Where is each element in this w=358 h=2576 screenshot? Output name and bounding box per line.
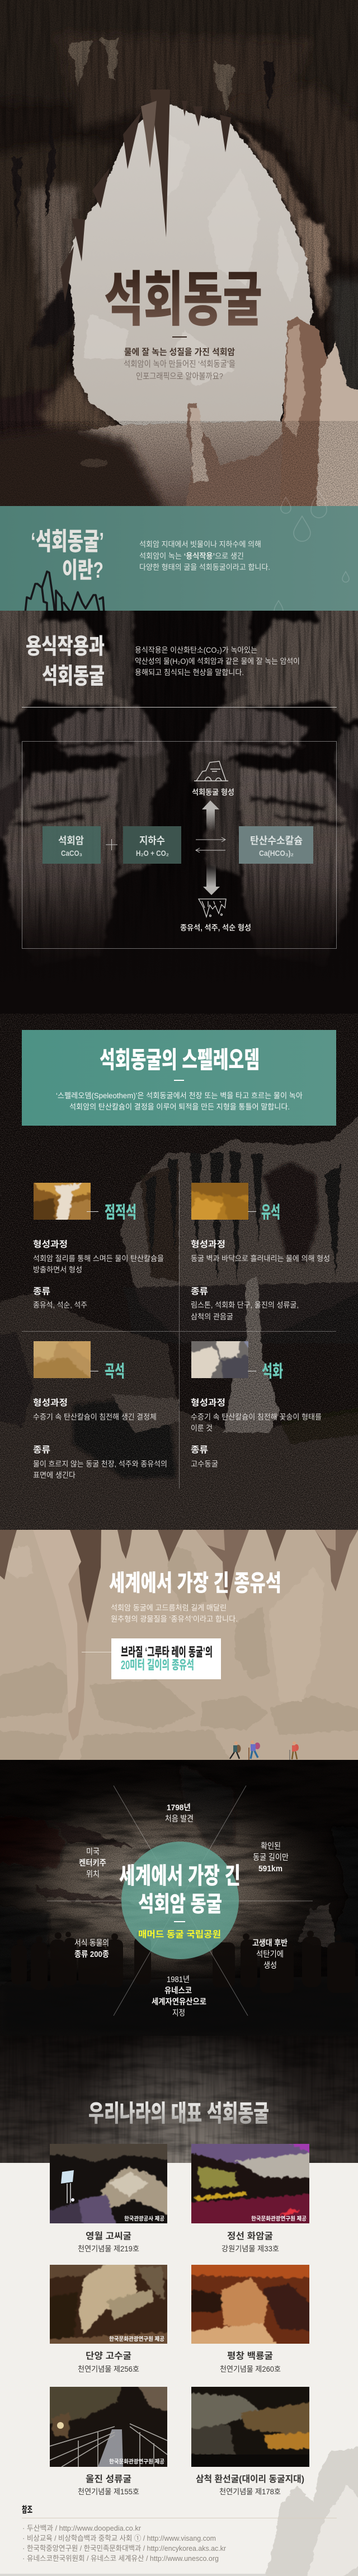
section: Korean caves list <box>0 2138 358 2576</box>
photo: Hwaam cave: 한국문화관광연구원 제공 <box>251 2215 307 2222</box>
quadrant: helictite: 수증기 속 탄산칼슘이 침전해 생긴 결정체 <box>33 1413 157 1421</box>
fact: length: 확인된 <box>261 1842 281 1851</box>
cave: Yeongwol Gossi: 천연기념물 제219호 <box>78 2245 139 2253</box>
references: 두산백과 / http://www.doopedia.co.kr <box>27 2524 142 2532</box>
box: groundwater <box>123 826 181 864</box>
arrow: up <box>202 800 219 831</box>
definition text: 석회암 지대에서 빗물이나 지하수에 의해 <box>139 540 261 549</box>
background rock splash <box>263 2446 358 2576</box>
icon: stalactites <box>199 899 226 917</box>
mirrored rock background <box>0 605 358 1014</box>
quadrant: helictite: 표면에 생긴다 <box>33 1471 76 1479</box>
hero subtitle: 인포그래픽으로 알아볼까요? <box>136 372 223 381</box>
box: groundwater: 지하수 <box>139 835 165 846</box>
definition text: 다양한 형태의 굴을 석회동굴이라고 합니다. <box>139 563 270 572</box>
people silhouettes <box>11 1931 355 1993</box>
stalactite text <box>111 1604 238 1623</box>
heading: Korean caves: 우리나라의 대표 석회동굴 <box>88 2100 269 2127</box>
cave walls <box>0 0 358 434</box>
quadrant: flowstone <box>186 1177 330 1321</box>
references: 참조 <box>22 2505 32 2515</box>
heading: longest stalactite: 세계에서 가장 긴 종유석 <box>109 1570 281 1596</box>
fact: discovered: 처음 발견 <box>165 1814 194 1824</box>
cave: Pyeongchang Baekryong: 천연기념물 제260호 <box>220 2365 281 2373</box>
title divider <box>172 336 187 338</box>
cave: Pyeongchang Baekryong <box>186 2259 315 2373</box>
section: speleothems <box>0 1014 358 1539</box>
cave: Uljin Seongnyu <box>45 2381 173 2496</box>
quadrant: dripstone <box>28 1177 164 1309</box>
icon: mountain outline <box>25 572 104 613</box>
circle badge: 매머드 동굴 국립공원 <box>138 1929 221 1940</box>
quadrant: dripstone: 방출하면서 형성 <box>33 1266 82 1274</box>
title: 석회동굴 <box>104 267 262 333</box>
cave: Danyang Gosu: 천연기념물 제256호 <box>78 2365 139 2373</box>
photo: flowstone <box>186 1177 254 1225</box>
background rock patches <box>0 1545 358 1769</box>
quadrant: flowstone: 림스톤, 석회화 단구, 울진의 성류굴, <box>191 1301 299 1309</box>
references: · <box>22 2554 25 2563</box>
definition text: 석회암이 녹는 ‘용식작용’으로 생긴 <box>139 552 244 560</box>
callout: Gruta Rei: 20미터 길이의 종유석 <box>121 1658 194 1672</box>
heading: speleothem: 석회동굴의 스펠레오뎀 <box>100 1047 260 1073</box>
fact: species: 서식 동물의 <box>74 1938 109 1948</box>
references: · <box>22 2544 25 2552</box>
quadrant: anthodite: 종류 <box>191 1445 208 1455</box>
section: Korean caves header <box>0 2036 358 2163</box>
quadrant: helictite <box>28 1336 167 1479</box>
cave opening sky <box>68 104 313 425</box>
label: anthodite: 석화 <box>262 1362 283 1381</box>
fact: location: 켄터키주 <box>79 1858 106 1868</box>
references: · <box>22 2534 25 2542</box>
fact: discovered: 1798년 <box>167 1803 191 1812</box>
cave rock background <box>0 1760 358 2036</box>
box: limestone <box>43 826 101 864</box>
quadrant: helictite: 형성과정 <box>33 1398 68 1408</box>
cave floor <box>0 420 283 506</box>
fact: formed: 고생대 후반 <box>252 1938 288 1948</box>
chemistry diagram <box>22 741 337 948</box>
intro text <box>56 1092 303 1111</box>
references: 한국학중앙연구원 / 한국민족문화대백과 / http://encykorea.aks.ac.kr <box>27 2544 227 2552</box>
star lines <box>47 1786 313 2016</box>
fact: length: 591km <box>258 1865 282 1874</box>
heading: longest cave: 세계에서 가장 긴 <box>119 1863 241 1889</box>
photo: Seongnyu cave <box>45 2381 173 2467</box>
stalactite text: 원추형의 광물질을 ‘종유석’이라고 합니다. <box>111 1615 238 1623</box>
arrow: down <box>203 864 220 895</box>
section: longest stalactite <box>0 1530 358 1769</box>
photo: Gosu cave: 한국문화관광연구원 제공 <box>109 2335 164 2343</box>
box: groundwater: H₂O + CO₂ <box>136 849 169 858</box>
photo: Baekryong cave <box>186 2259 315 2349</box>
photo: Gossi cave <box>45 2138 173 2229</box>
section: hero cave <box>0 0 358 515</box>
big stalactite <box>0 1530 358 1741</box>
panel: speleothem intro <box>22 1030 336 1126</box>
icon: water drops <box>274 491 349 616</box>
quadrant: dripstone: 석회암 절리를 통해 스며든 물이 탄산칼슘을 <box>33 1254 164 1263</box>
fact: formed <box>252 1938 288 1970</box>
label: speleothems formed: 종유석, 석주, 석순 형성 <box>180 924 251 932</box>
cave: Yeongwol Gossi: 영월 고씨굴 <box>86 2231 131 2241</box>
box: limestone: CaCO₃ <box>61 849 82 858</box>
cave: Samcheok Hwanseon <box>186 2387 315 2496</box>
callout: Gruta Rei: 브라질 ‘그루타 레이 동굴’의 <box>121 1645 213 1659</box>
fact: location: 미국 <box>86 1847 100 1857</box>
fact: formed: 생성 <box>263 1961 277 1970</box>
corrosion text: 약산성의 물(H₂O)에 석회암과 같은 물에 잘 녹는 암석이 <box>135 657 300 666</box>
fact: species: 종류 200종 <box>74 1950 109 1959</box>
icon: cave <box>194 761 228 781</box>
label: helictite: 곡석 <box>105 1362 125 1381</box>
panel: what is a limestone cave <box>0 491 358 616</box>
fact: UNESCO: 1981년 <box>167 1975 190 1984</box>
fact: discovered <box>165 1803 194 1824</box>
callout: Gruta Rei <box>111 1638 221 1679</box>
photo: dripstone <box>28 1177 96 1225</box>
cave: Jeongseon Hwaam: 정선 화암굴 <box>227 2231 273 2241</box>
section: corrosion and caves <box>0 605 358 1014</box>
circle badge: 석회암 동굴 <box>138 1893 222 1917</box>
hero subtitle: 석회암이 녹아 만들어진 ‘석회동굴’을 <box>124 359 235 369</box>
quadrant: flowstone: 동굴 벽과 바닥으로 흘러내리는 물에 의해 형성 <box>191 1254 330 1263</box>
quadrant: helictite: 물이 흐르지 않는 동굴 천장, 석주와 종유석의 <box>33 1460 167 1468</box>
photo: Hwanseon cave <box>186 2387 315 2467</box>
cave: Samcheok Hwanseon: 삼척 환선굴(대이리 동굴지대) <box>196 2474 304 2484</box>
label: cave formed: 석회동굴 형성 <box>192 788 234 797</box>
corrosion text <box>135 646 300 677</box>
corrosion text: 용해되고 침식되는 현상을 말합니다. <box>135 668 244 677</box>
heading: corrosion <box>26 635 105 689</box>
stalactite text: 석회암 동굴에 고드름처럼 길게 매달린 <box>111 1604 227 1612</box>
heading: what is: 이란? <box>62 558 103 583</box>
fact: location: 위치 <box>86 1870 100 1879</box>
heading: corrosion: 석회동굴 <box>42 664 105 689</box>
definition text <box>139 540 270 572</box>
photo: Gosu cave <box>45 2259 173 2349</box>
heading: what is: ‘석회동굴’ <box>31 528 104 555</box>
cave background <box>0 1014 358 1539</box>
quadrant: anthodite: 이룬 것 <box>191 1424 213 1432</box>
fact: length: 동굴 길이만 <box>253 1853 289 1862</box>
quadrant: anthodite: 고수동굴 <box>191 1460 218 1468</box>
cave: Jeongseon Hwaam <box>186 2138 315 2253</box>
quadrant: anthodite: 수증기 속 탄산칼슘이 침전해 꽃송이 형태를 <box>191 1413 322 1421</box>
quadrant: flowstone: 형성과정 <box>191 1239 225 1249</box>
cave: Uljin Seongnyu: 천연기념물 제155호 <box>78 2488 139 2496</box>
section: longest limestone cave <box>0 1760 358 2036</box>
quadrant: dripstone: 종유석, 석순, 석주 <box>33 1301 87 1309</box>
box: calcium bicarbonate <box>239 826 313 864</box>
photo: Hwaam cave <box>186 2138 315 2229</box>
fact: formed: 석탄기에 <box>256 1950 284 1959</box>
photo: Gossi cave: 한국관광공사 제공 <box>124 2215 164 2222</box>
box: calcium bicarbonate: 탄산수소칼슘 <box>250 835 303 846</box>
fact: UNESCO <box>152 1975 206 2018</box>
cave: Danyang Gosu <box>45 2259 173 2373</box>
fact: UNESCO: 유네스코 <box>164 1986 192 1996</box>
corrosion text: 용식작용은 이산화탄소(CO₂)가 녹아있는 <box>135 646 257 654</box>
hanging stalactites <box>60 90 231 302</box>
hero subtitle <box>124 347 235 381</box>
photo: Seongnyu cave: 한국문화관광연구원 제공 <box>109 2458 164 2465</box>
intro text: 석회암의 탄산칼슘이 결정을 이루어 퇴적을 만든 지형을 통틀어 말합니다. <box>69 1103 290 1111</box>
cave: Pyeongchang Baekryong: 평창 백룡굴 <box>227 2351 273 2361</box>
cave: Uljin Seongnyu: 울진 성류굴 <box>86 2474 131 2484</box>
fact: length <box>253 1842 289 1874</box>
quadrant: flowstone: 종류 <box>191 1287 208 1296</box>
quadrant: dripstone: 형성과정 <box>33 1239 68 1249</box>
label: dripstone: 점적석 <box>105 1203 136 1222</box>
photo: helictite <box>28 1336 96 1384</box>
box: limestone: 석회암 <box>58 835 84 846</box>
fact: UNESCO: 지정 <box>172 2008 185 2018</box>
quadrant: flowstone: 삼척의 관음굴 <box>191 1313 233 1321</box>
references: 유네스코한국위원회 / 유네스코 세계유산 / http://www.unesco.org <box>27 2554 219 2563</box>
references: 비상교육 / 비상학습백과 중학교 사회 ① / http://www.visang.com <box>27 2534 216 2542</box>
intro text: ‘스펠레오뎀(Speleothem)’은 석회동굴에서 천장 또는 벽을 타고 흐르는 물이 녹아 <box>56 1092 303 1100</box>
label: flowstone: 유석 <box>261 1203 280 1222</box>
circle badge <box>119 1842 241 1959</box>
quadrant: dripstone: 종류 <box>33 1287 50 1296</box>
quadrant: anthodite: 형성과정 <box>191 1398 225 1408</box>
quadrant: anthodite <box>186 1336 322 1468</box>
hero subtitle: 물에 잘 녹는 성질을 가진 석회암 <box>124 347 235 357</box>
cave: Jeongseon Hwaam: 강원기념물 제33호 <box>222 2245 279 2253</box>
fact: species <box>74 1938 109 1959</box>
cave: Samcheok Hwanseon: 천연기념물 제178호 <box>219 2488 281 2496</box>
box: calcium bicarbonate: Ca(HCO₃)₂ <box>259 849 294 858</box>
fact: UNESCO: 세계자연유산으로 <box>152 1997 206 2007</box>
cave: Yeongwol Gossi <box>45 2138 173 2253</box>
arrows: reversible reaction <box>196 837 225 853</box>
icon: hikers <box>230 1740 299 1760</box>
photo: anthodite <box>186 1336 254 1384</box>
stalagmites <box>79 316 358 515</box>
heading: what is <box>31 528 104 583</box>
references: · <box>22 2524 25 2532</box>
cave: Danyang Gosu: 단양 고수굴 <box>86 2351 131 2361</box>
references <box>22 2505 337 2563</box>
fact: location <box>79 1847 106 1879</box>
plus sign <box>106 839 117 850</box>
heading: corrosion: 용식작용과 <box>26 635 105 659</box>
quadrant: helictite: 종류 <box>33 1445 50 1455</box>
